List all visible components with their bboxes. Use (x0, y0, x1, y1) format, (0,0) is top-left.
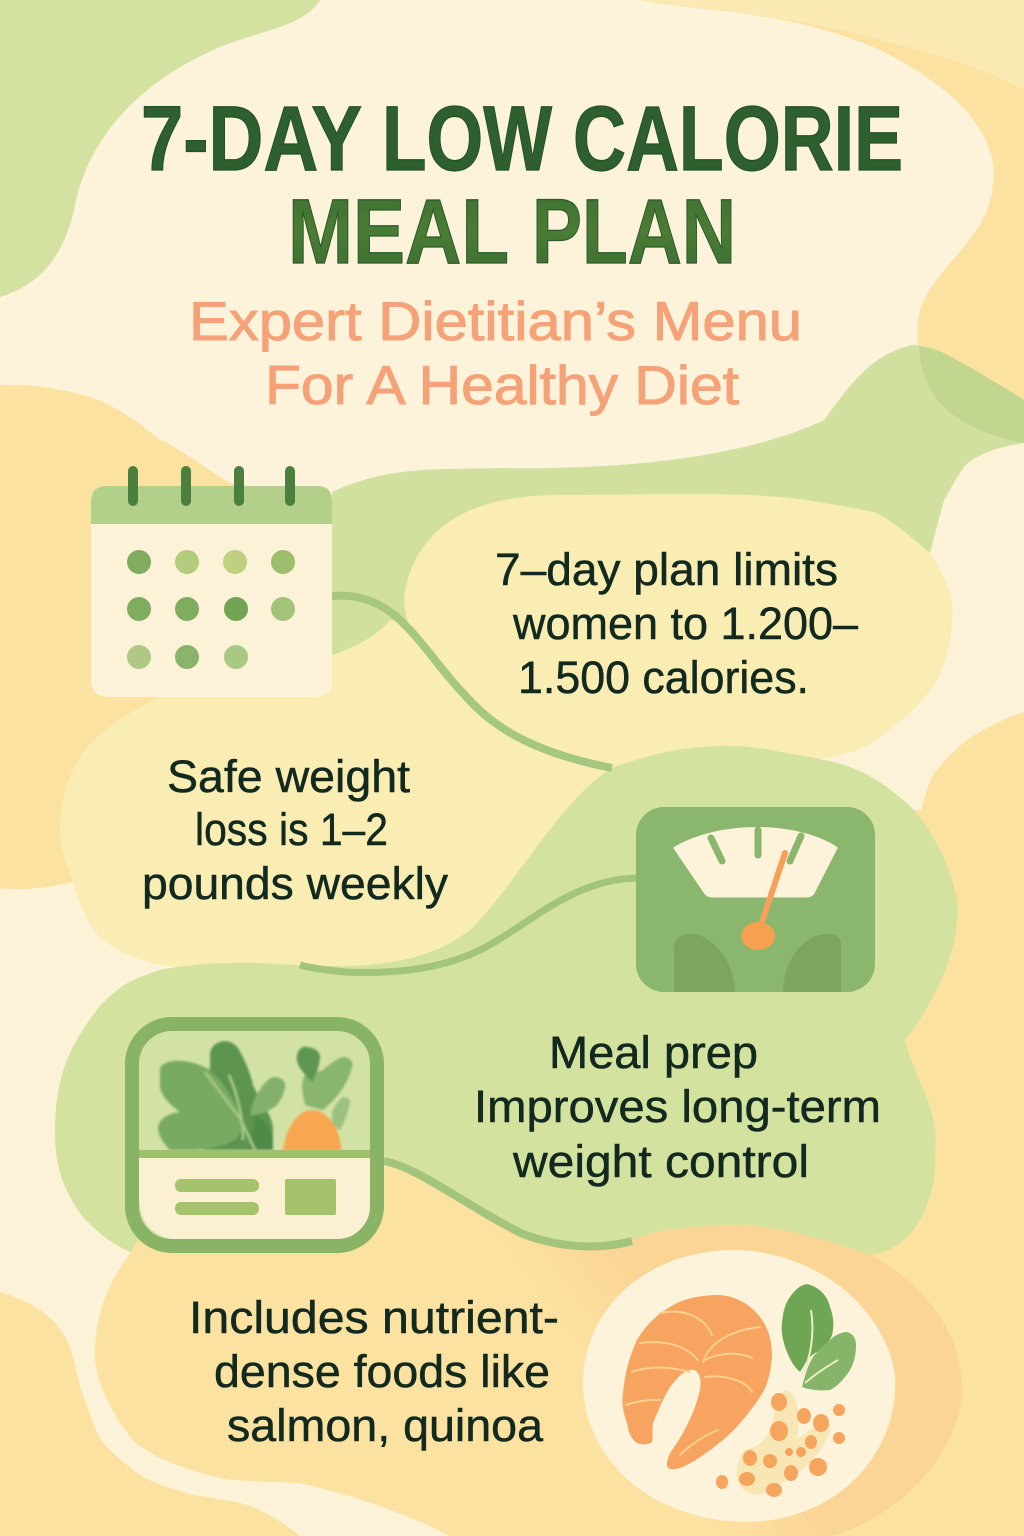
title: MEAL (288, 181, 509, 283)
title: 7-DAY (141, 88, 362, 190)
title: PLAN (532, 181, 736, 283)
text: safe weight loss: Safe weight (167, 751, 411, 802)
text: plan limits (495, 544, 858, 703)
title (141, 88, 903, 283)
text: meal prep: Improves long-term (474, 1081, 881, 1132)
text: nutrient-dense foods: Includes nutrient- (189, 1292, 559, 1343)
text: nutrient-dense foods (189, 1292, 559, 1451)
background blob: left pale yellow (60, 620, 625, 972)
text: plan limits: 7–day plan limits (495, 544, 838, 595)
background blob: green band (332, 345, 1024, 800)
background blob: top-left green (0, 0, 320, 297)
bubble: plan limits (404, 494, 953, 770)
text: nutrient-dense foods: dense foods like (214, 1346, 550, 1397)
background blob: bottom yellow with plate halo (95, 1161, 962, 1536)
icon: calendar (91, 471, 332, 697)
title: CALORIE (573, 88, 903, 190)
quinoa (737, 1390, 830, 1495)
text: plan limits: 1.500 calories. (518, 652, 809, 703)
background blob: top cream (0, 0, 994, 520)
background blob: scale green (55, 746, 958, 1300)
icon: scale (636, 807, 875, 992)
title: LOW (382, 88, 552, 190)
text: meal prep (474, 1027, 881, 1187)
connector: scale to safe loss (300, 878, 636, 972)
salmon (622, 1295, 772, 1469)
background blob: top-right green overlap (919, 347, 1024, 443)
text: plan limits: women to 1.200– (512, 598, 858, 649)
icon: meal prep box (132, 1024, 377, 1246)
subtitle: Expert Dietitian’s Menu (189, 290, 802, 352)
text: nutrient-dense foods: salmon, quinoa (227, 1400, 544, 1451)
text: safe weight loss (142, 751, 449, 909)
connector: meal box to meal prep (384, 1161, 632, 1246)
text: safe weight loss: loss is 1–2 (195, 804, 388, 855)
subtitle (189, 290, 802, 416)
icon: leafy greens (158, 1041, 353, 1151)
text: safe weight loss: pounds weekly (142, 858, 449, 909)
text: meal prep: weight control (512, 1136, 809, 1187)
text: meal prep: Meal prep (549, 1027, 758, 1078)
spinach (782, 1284, 833, 1372)
icon: plate with salmon, spinach and quinoa (583, 1250, 895, 1522)
subtitle: For A Healthy Diet (265, 354, 739, 416)
background blob: right cream (800, 443, 1024, 810)
connector: calendar to plan (332, 596, 612, 768)
